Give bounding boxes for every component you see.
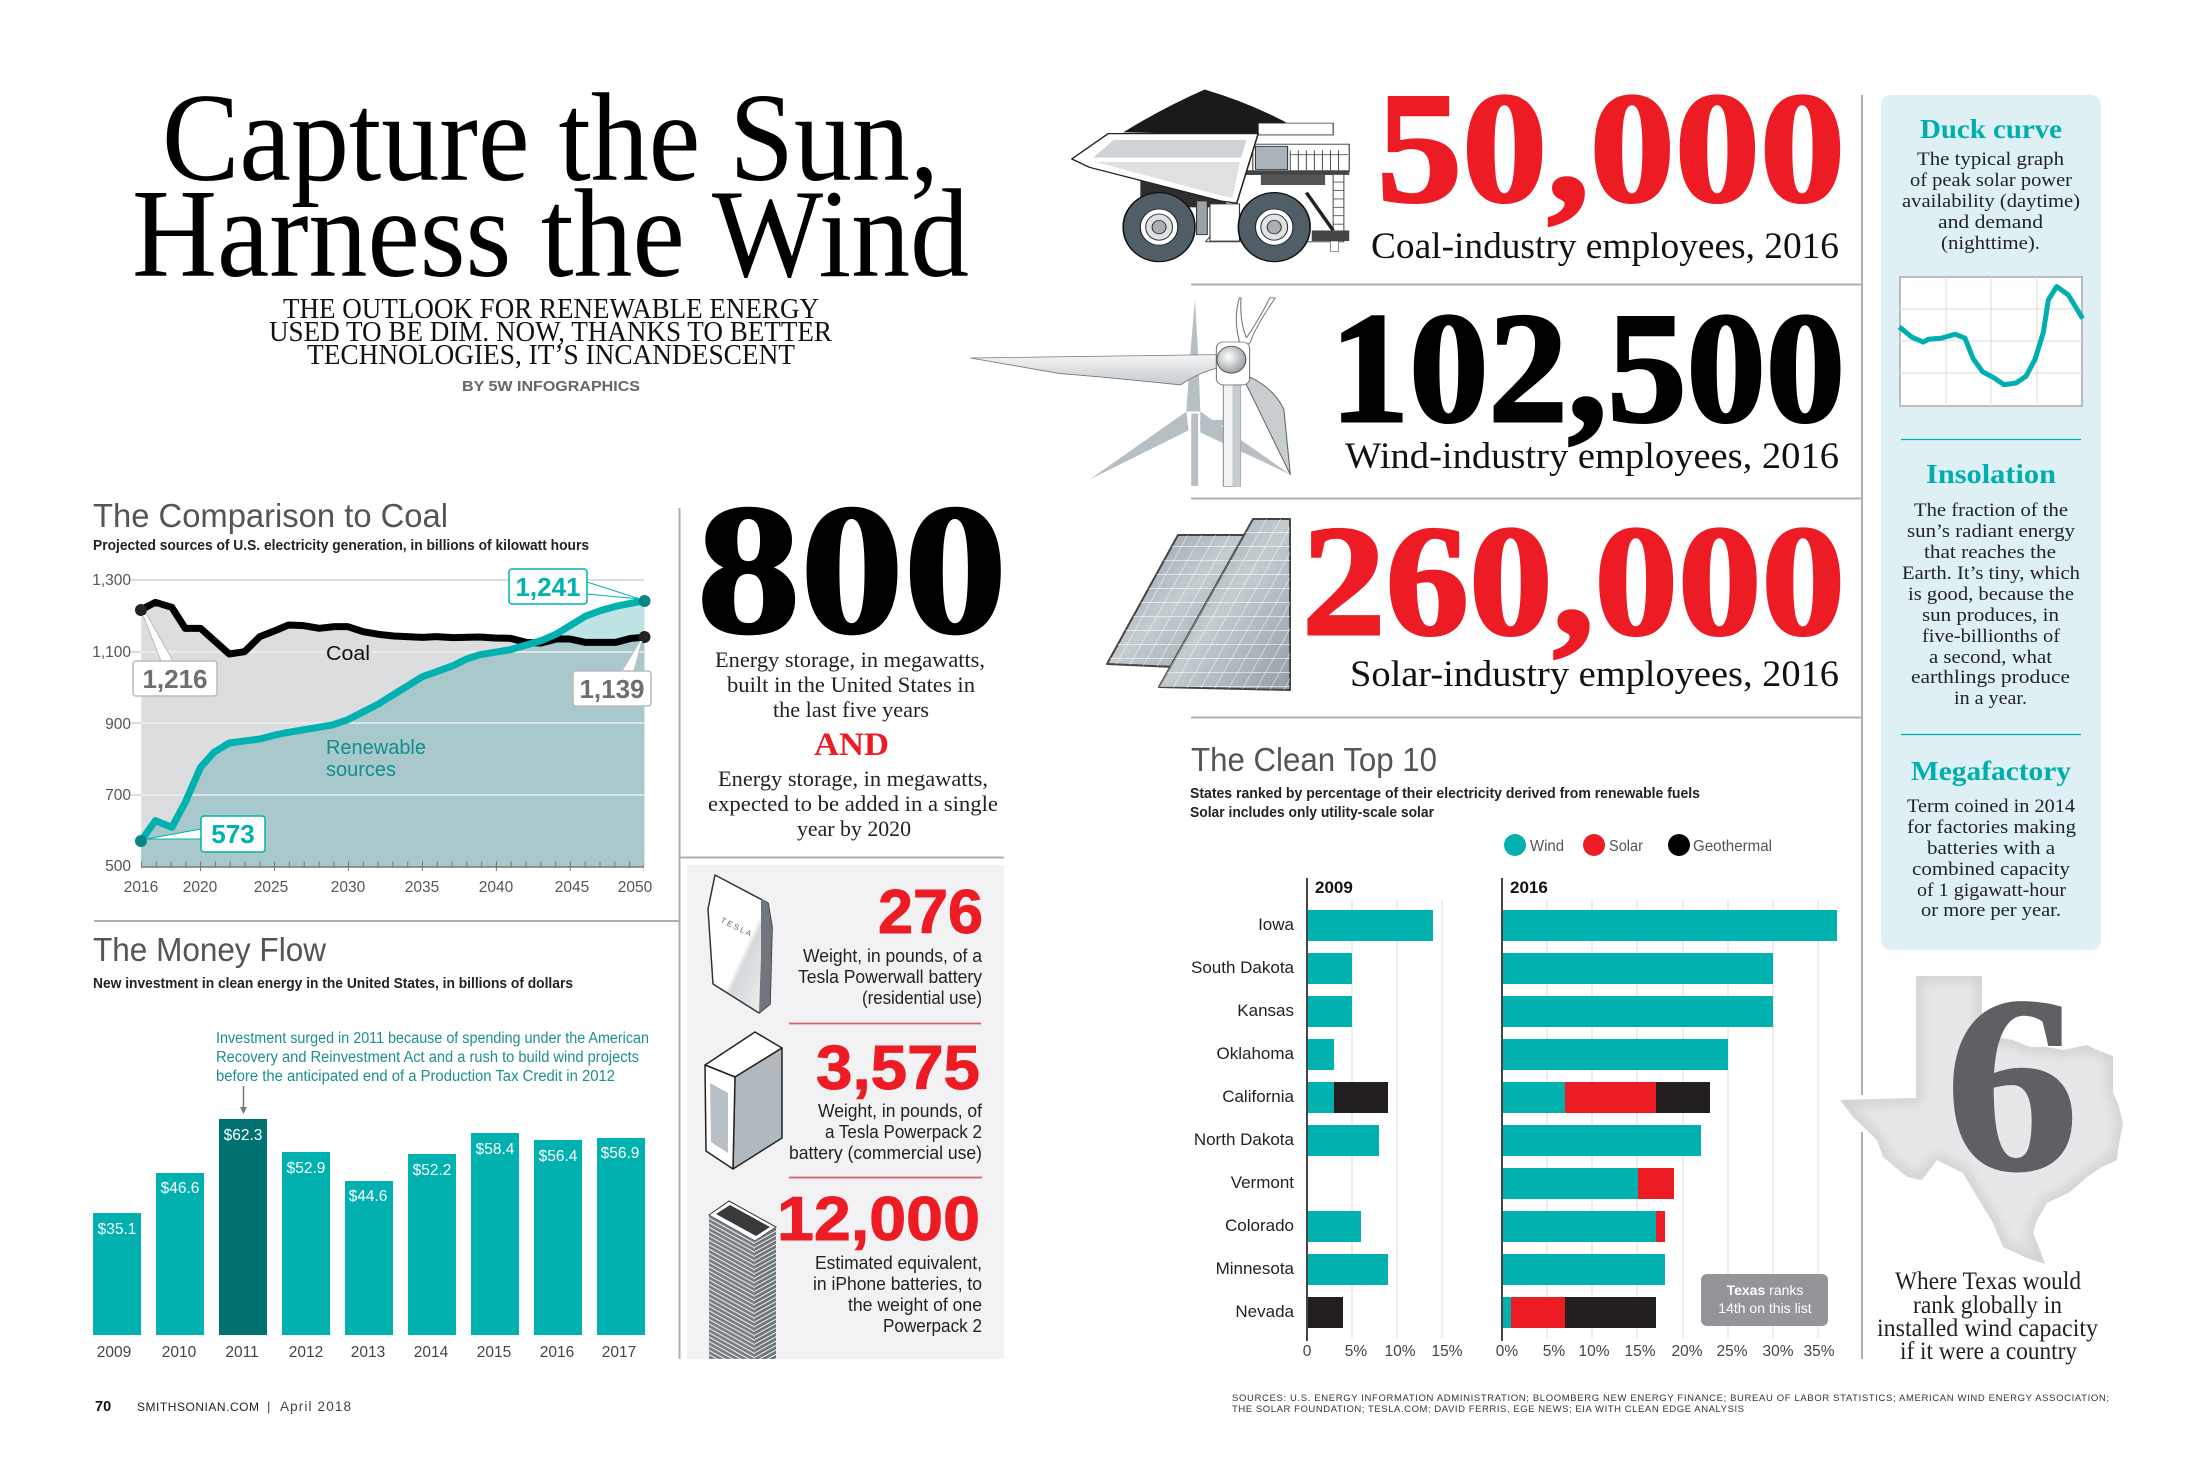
footer: folio: SMITHSONIAN.COM bbox=[137, 1400, 259, 1414]
text: Powerwall weight bbox=[798, 878, 983, 1008]
bar chart: clean energy investment: $44.6 bbox=[349, 1188, 387, 1205]
bar chart: 2016: 25% bbox=[1716, 1343, 1748, 1360]
footer: folio: 70 bbox=[95, 1399, 111, 1415]
subheading: clean top 10: States ranked by percentage of their electricity derived from renewable fuels bbox=[1190, 786, 1700, 802]
stat: 800 megawatts: Energy storage, in megawatts, bbox=[718, 766, 988, 791]
term: duck curve: (nighttime). bbox=[1941, 233, 2040, 254]
bar chart: 2009: 0 bbox=[1303, 1343, 1312, 1360]
sources bbox=[1232, 1393, 2109, 1415]
stat: 800 megawatts: Energy storage, in megawatts, bbox=[715, 647, 985, 672]
icon: iPhone stack bbox=[709, 1201, 776, 1359]
bar chart: 2009: 2009 bbox=[1315, 878, 1353, 897]
term: megafactory: or more per year. bbox=[1921, 900, 2061, 921]
axis labels: comparison chart: 500 bbox=[105, 858, 131, 875]
axis labels: comparison chart: 1,300 bbox=[92, 572, 131, 589]
text: Powerpack weight: battery (commercial use) bbox=[789, 1143, 982, 1163]
icon: Tesla Powerwall: TESLA bbox=[719, 916, 755, 939]
bar chart: clean energy investment: 2013 bbox=[351, 1344, 385, 1361]
state labels: Vermont bbox=[1231, 1173, 1294, 1192]
term: insolation: is good, because the bbox=[1908, 584, 2074, 605]
footer: folio: | bbox=[267, 1399, 270, 1414]
label: coal series: Coal bbox=[326, 643, 370, 665]
bar chart: 2009: 15% bbox=[1431, 1343, 1463, 1360]
bar chart: 2016: 30% bbox=[1762, 1343, 1794, 1360]
term: megafactory: Term coined in 2014 bbox=[1907, 796, 2076, 817]
bar chart: 2009: 5% bbox=[1345, 1343, 1367, 1360]
bar chart: clean energy investment: 2012 bbox=[289, 1344, 323, 1361]
term: duck curve: The typical graph bbox=[1917, 149, 2065, 170]
text: Texas caption: Where Texas would bbox=[1895, 1268, 2081, 1295]
bar chart: clean energy investment: 2010 bbox=[162, 1344, 197, 1361]
callout: coal 2016 value bbox=[133, 661, 217, 696]
icon: Texas map with rank 6 bbox=[1840, 976, 2123, 1264]
state labels: California bbox=[1222, 1087, 1295, 1106]
bar chart: clean energy investment: $46.6 bbox=[161, 1180, 199, 1197]
bar chart: clean energy investment: $56.9 bbox=[601, 1145, 639, 1162]
subheading: comparison chart: Projected sources of U.S. electricity generation, in billions of kilowatt hours bbox=[93, 538, 589, 554]
axis labels: comparison chart: 700 bbox=[105, 787, 131, 804]
bar chart: clean energy investment: 2015 bbox=[477, 1344, 511, 1361]
stat: 800 megawatts: expected to be added in a single bbox=[708, 791, 998, 816]
subtitle: USED TO BE DIM. NOW, THANKS TO BETTER bbox=[269, 317, 832, 348]
stat: coal employees: 50,000 bbox=[1377, 61, 1845, 236]
bar chart: clean energy investment bbox=[93, 1119, 645, 1361]
bar chart: 2009 bbox=[1303, 878, 1463, 1360]
label: renewable series bbox=[326, 737, 426, 781]
text: Powerpack weight: Weight, in pounds, of bbox=[818, 1101, 983, 1121]
term: insolation: The fraction of the bbox=[1914, 500, 2068, 521]
text: iPhone equivalent: Powerpack 2 bbox=[883, 1316, 982, 1336]
axis labels: comparison chart: 900 bbox=[105, 716, 131, 733]
stat: 800 megawatts: year by 2020 bbox=[797, 816, 911, 841]
heading: The Money Flow: The Money Flow bbox=[93, 931, 326, 968]
text: Powerwall weight: Weight, in pounds, of a bbox=[803, 946, 983, 966]
bar chart: 2016: 15% bbox=[1624, 1343, 1656, 1360]
icon: Texas map with rank 6: 6 bbox=[1945, 944, 2079, 1224]
heading: The Comparison to Coal: The Comparison to Coal bbox=[93, 497, 448, 534]
line chart: coal versus renewable bbox=[131, 580, 650, 867]
term: insolation: Insolation bbox=[1926, 459, 2056, 489]
bar chart: clean energy investment: $62.3 bbox=[224, 1127, 262, 1144]
footer: folio bbox=[95, 1399, 351, 1415]
bar chart: 2016 bbox=[1496, 878, 1837, 1360]
term: insolation: earthlings produce bbox=[1911, 667, 2070, 688]
label: renewable series: sources bbox=[326, 759, 396, 781]
text: Powerwall weight: (residential use) bbox=[862, 988, 982, 1008]
subtitle: TECHNOLOGIES, IT’S INCANDESCENT bbox=[307, 340, 795, 371]
annotation: 2011 surge: before the anticipated end of a Production Tax Credit in 2012 bbox=[216, 1068, 615, 1085]
text: Powerpack weight: 3,575 bbox=[816, 1034, 980, 1103]
text: Texas caption bbox=[1877, 1268, 2098, 1365]
state labels: Iowa bbox=[1258, 915, 1295, 934]
subtitle bbox=[269, 294, 832, 371]
legend bbox=[1504, 834, 1772, 856]
stat: 800 megawatts bbox=[697, 467, 1007, 841]
callout: renewable 2016 value: 573 bbox=[211, 819, 255, 849]
callout: coal 2050 value: 1,139 bbox=[579, 674, 645, 704]
bar chart: clean energy investment: 2016 bbox=[540, 1344, 574, 1361]
subtitle: THE OUTLOOK FOR RENEWABLE ENERGY bbox=[283, 294, 819, 325]
legend: Solar bbox=[1609, 838, 1644, 855]
title bbox=[132, 69, 969, 304]
title: Harness the Wind bbox=[132, 165, 969, 304]
subheading: clean top 10: Solar includes only utility-scale solar bbox=[1190, 805, 1434, 821]
state labels: Nevada bbox=[1235, 1302, 1295, 1321]
axis labels: comparison chart: 1,100 bbox=[92, 644, 131, 661]
term: megafactory: combined capacity bbox=[1912, 859, 2071, 880]
state labels: South Dakota bbox=[1191, 958, 1295, 977]
text: Powerwall weight: 276 bbox=[878, 878, 983, 947]
text: iPhone equivalent bbox=[777, 1185, 982, 1336]
icon: coal mining truck bbox=[1072, 89, 1349, 262]
text: Texas caption: rank globally in bbox=[1913, 1292, 2062, 1319]
axis labels: comparison chart: 2040 bbox=[479, 879, 514, 896]
bar chart: 2016: 10% bbox=[1578, 1343, 1610, 1360]
annotation: 2011 surge: Recovery and Reinvestment Act and a rush to build wind projects bbox=[216, 1049, 639, 1066]
subheading: money flow: New investment in clean energy in the United States, in billions of dollars bbox=[93, 976, 573, 992]
panel: battery weights bbox=[687, 865, 1004, 1359]
annotation: 2011 surge bbox=[216, 1030, 649, 1085]
term: insolation: a second, what bbox=[1929, 647, 2053, 668]
term: duck curve: and demand bbox=[1938, 212, 2044, 233]
stat: wind employees: 102,500 bbox=[1330, 281, 1845, 456]
legend: Geothermal bbox=[1693, 838, 1772, 855]
term: insolation: Earth. It’s tiny, which bbox=[1902, 563, 2081, 584]
callout: coal 2016 value: 1,216 bbox=[142, 664, 208, 694]
text: iPhone equivalent: the weight of one bbox=[848, 1295, 982, 1315]
byline: BY 5W INFOGRAPHICS bbox=[462, 379, 640, 395]
stat: 800 megawatts: built in the United States in bbox=[727, 672, 975, 697]
state labels: North Dakota bbox=[1194, 1130, 1295, 1149]
term: megafactory: for factories making bbox=[1907, 817, 2077, 838]
sources: SOURCES: U.S. ENERGY INFORMATION ADMINISTRATION; BLOOMBERG NEW ENERGY FINANCE; BUREAU OF LABOR STATISTICS; AMERICAN WIND ENERGY ASSOCIATION; bbox=[1232, 1393, 2109, 1404]
callout: Texas rank: 14th on this list bbox=[1718, 1300, 1812, 1316]
text: Powerpack weight bbox=[789, 1034, 983, 1163]
stat: 800 megawatts: the last five years bbox=[773, 697, 929, 722]
bar chart: clean energy investment: $52.2 bbox=[413, 1162, 451, 1179]
bar chart: clean energy investment: $58.4 bbox=[476, 1141, 515, 1158]
callout: Texas rank: Texas ranks bbox=[1727, 1282, 1803, 1298]
term: megafactory: batteries with a bbox=[1927, 838, 2056, 859]
state labels: Minnesota bbox=[1216, 1259, 1295, 1278]
text: Powerpack weight: a Tesla Powerpack 2 bbox=[825, 1122, 982, 1142]
stat: solar employees: 260,000 bbox=[1302, 494, 1845, 669]
bar chart: 2016: 5% bbox=[1543, 1343, 1565, 1360]
term: duck curve: availability (daytime) bbox=[1902, 191, 2080, 212]
bar chart: clean energy investment: 2014 bbox=[414, 1344, 449, 1361]
chart: duck curve bbox=[1899, 277, 2083, 406]
state labels: Colorado bbox=[1225, 1216, 1294, 1235]
axis labels: comparison chart: 2020 bbox=[183, 879, 218, 896]
callout: renewable 2016 value bbox=[201, 816, 265, 852]
callout: Texas rank bbox=[1701, 1274, 1828, 1326]
stat: 800 megawatts: 800 bbox=[697, 467, 1007, 673]
text: Texas caption: if it were a country bbox=[1900, 1338, 2077, 1365]
panel: glossary bbox=[1881, 95, 2101, 950]
icon: wind turbines bbox=[971, 298, 1290, 486]
axis labels: comparison chart: 2016 bbox=[124, 879, 158, 896]
term: megafactory bbox=[1907, 756, 2077, 921]
bar chart: clean energy investment: $52.9 bbox=[287, 1160, 325, 1177]
bar chart: clean energy investment: $35.1 bbox=[98, 1221, 136, 1238]
text: iPhone equivalent: in iPhone batteries, to bbox=[813, 1274, 982, 1294]
axis labels: comparison chart: 2025 bbox=[254, 879, 288, 896]
state labels: Oklahoma bbox=[1217, 1044, 1295, 1063]
term: insolation bbox=[1902, 459, 2081, 709]
callout: renewable 2050 value: 1,241 bbox=[515, 572, 581, 602]
term: duck curve: of peak solar power bbox=[1910, 170, 2073, 191]
state labels: Kansas bbox=[1237, 1001, 1294, 1020]
text: Powerwall weight: Tesla Powerwall battery bbox=[798, 967, 982, 987]
icon: Tesla Powerwall bbox=[708, 875, 772, 1013]
heading: The Clean Top 10: The Clean Top 10 bbox=[1191, 741, 1437, 778]
state labels bbox=[1191, 915, 1295, 1321]
axis labels: comparison chart bbox=[92, 572, 653, 896]
term: insolation: sun’s radiant energy bbox=[1907, 521, 2076, 542]
sources: THE SOLAR FOUNDATION; TESLA.COM; DAVID FERRIS, EGE NEWS; EIA WITH CLEAN EDGE ANALYSIS bbox=[1232, 1404, 1744, 1415]
bar chart: clean energy investment: 2011 bbox=[225, 1344, 259, 1361]
stat: wind employees: Wind-industry employees, 2016 bbox=[1345, 436, 1839, 477]
term: duck curve: Duck curve bbox=[1920, 114, 2062, 144]
term: insolation: five-billionths of bbox=[1922, 626, 2061, 647]
legend: Wind bbox=[1530, 838, 1564, 855]
term: megafactory: of 1 gigawatt-hour bbox=[1917, 880, 2067, 901]
arrow: to 2011 bar bbox=[240, 1086, 247, 1114]
label: renewable series: Renewable bbox=[326, 737, 426, 759]
bar chart: 2009: 10% bbox=[1384, 1343, 1416, 1360]
bar chart: clean energy investment: $56.4 bbox=[539, 1148, 578, 1165]
term: insolation: sun produces, in bbox=[1922, 605, 2060, 626]
text: iPhone equivalent: 12,000 bbox=[777, 1185, 980, 1254]
text: Texas caption: installed wind capacity bbox=[1877, 1315, 2098, 1342]
term: insolation: in a year. bbox=[1954, 688, 2027, 709]
text: iPhone equivalent: Estimated equivalent, bbox=[815, 1253, 982, 1273]
axis labels: comparison chart: 2050 bbox=[618, 879, 653, 896]
bar chart: 2016: 0% bbox=[1496, 1343, 1518, 1360]
stat: 800 megawatts: AND bbox=[814, 727, 889, 763]
axis labels: comparison chart: 2035 bbox=[405, 879, 439, 896]
term: duck curve bbox=[1902, 114, 2080, 254]
icon: Tesla Powerpack bbox=[705, 1032, 782, 1169]
stat: coal employees: Coal-industry employees, 2016 bbox=[1371, 226, 1839, 267]
term: megafactory: Megafactory bbox=[1911, 756, 2072, 786]
title: Capture the Sun, bbox=[162, 69, 939, 208]
stat: solar employees: Solar-industry employees, 2016 bbox=[1350, 654, 1839, 695]
axis labels: comparison chart: 2030 bbox=[331, 879, 366, 896]
bar chart: clean energy investment: 2017 bbox=[602, 1344, 636, 1361]
axis labels: comparison chart: 2045 bbox=[555, 879, 589, 896]
bar chart: clean energy investment: 2009 bbox=[97, 1344, 131, 1361]
subheading: clean top 10 bbox=[1190, 786, 1700, 821]
footer: folio: April 2018 bbox=[280, 1399, 351, 1414]
icon: solar panels bbox=[1107, 519, 1290, 690]
annotation: 2011 surge: Investment surged in 2011 because of spending under the American bbox=[216, 1030, 649, 1047]
bar chart: 2016: 2016 bbox=[1510, 878, 1548, 897]
bar chart: 2016: 20% bbox=[1671, 1343, 1703, 1360]
term: insolation: that reaches the bbox=[1924, 542, 2056, 563]
bar chart: 2016: 35% bbox=[1803, 1343, 1835, 1360]
